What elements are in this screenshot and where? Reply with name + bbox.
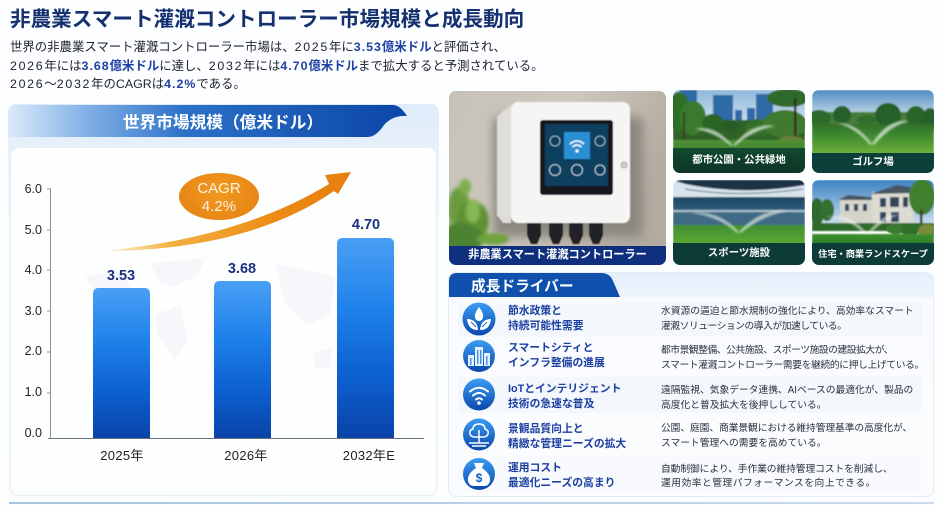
caption: urban park: 都市公園・公共緑地 <box>692 155 786 166</box>
y axis labels: 1.0 <box>25 385 42 399</box>
intro text block: 世界の非農業スマート灌漑コントローラー市場は、2025年に3.53億米ドルと評価され、 <box>10 40 506 54</box>
y axis labels <box>24 182 42 440</box>
y axis line and ticks <box>47 188 51 438</box>
driver title 3: IoTとインテリジェント <box>508 383 621 395</box>
intro text block: 2026年には3.68億米ドルに達し、2032年には4.70億米ドルまで拡大すると予測されている。 <box>10 58 544 72</box>
world map watermark <box>80 255 350 395</box>
icon: wifi <box>463 378 495 410</box>
callout: CAGR 4.2% <box>179 173 259 220</box>
value: 3.53: 3.53 <box>107 268 135 284</box>
driver title 2 <box>508 342 605 369</box>
row background 3 <box>458 377 922 413</box>
caption: residential: 住宅・商業ランドスケープ <box>818 249 928 259</box>
driver description 3 <box>661 384 913 411</box>
callout: CAGR 4.2%: 4.2% <box>202 198 236 215</box>
value: 4.70: 4.70 <box>352 217 380 233</box>
icon: money bag: $ <box>476 471 483 485</box>
driver title 4: 精緻な管理ニーズの拡大 <box>508 438 626 450</box>
photo: urban park <box>673 90 805 173</box>
caption: controller: 非農業スマート灌漑コントローラー <box>468 249 647 261</box>
driver title 2: スマートシティと <box>508 342 593 354</box>
driver title 1: 節水政策と <box>508 305 562 317</box>
panel: chart card <box>10 147 437 496</box>
intro text block: 2026～2032年のCAGRは4.2%である。 <box>10 77 246 91</box>
caption: golf <box>812 153 934 173</box>
caption: urban park <box>673 148 805 173</box>
arrow: growth trend <box>110 172 351 251</box>
driver description 2: 都市景観整備、公共施設、スポーツ施設の建設拡大が、 <box>661 345 893 356</box>
x axis line <box>48 438 424 439</box>
driver description 4: スマート管理への需要を高めている。 <box>661 438 826 449</box>
panel: market size chart <box>8 104 439 497</box>
driver description 4 <box>661 422 912 449</box>
caption: sports <box>673 243 805 265</box>
x label: 2025: 2025年 <box>100 448 144 463</box>
driver title 5: 運用コスト <box>508 462 562 474</box>
panel: growth drivers <box>448 272 934 497</box>
driver title 1 <box>508 304 584 332</box>
driver title 1: 持続可能性需要 <box>508 320 584 332</box>
driver description 2: スマート灌漑コントローラー需要を継続的に押し上げている。 <box>661 360 924 371</box>
photo: residential and commercial landscape <box>812 180 934 265</box>
x label: 2026: 2026年 <box>224 448 268 463</box>
driver description 4: 公園、庭園、商業景観における維持管理基準の高度化が、 <box>661 423 912 434</box>
icon: water drop and leaves <box>462 302 496 336</box>
y axis labels: 3.0 <box>25 304 42 318</box>
caption: golf: ゴルフ場 <box>852 157 894 168</box>
driver description 1: 灌漑ソリューションの導入が加速している。 <box>661 321 847 332</box>
driver title 4: 景観品質向上と <box>508 423 584 435</box>
caption: controller <box>449 246 666 265</box>
driver description 1: 水資源の逼迫と節水規制の強化により、高効率なスマート <box>661 306 914 317</box>
driver title 3: 技術の急速な普及 <box>508 398 594 410</box>
value: 3.68: 3.68 <box>228 261 256 277</box>
y axis labels: 2.0 <box>25 344 42 358</box>
driver description 3: 遠隔監視、気象データ連携、AIベースの最適化が、製品の <box>661 385 913 396</box>
photo: sports facility <box>673 180 805 265</box>
driver description 2 <box>661 344 924 371</box>
driver description 5: 運用効率と管理パフォーマンスを向上できる。 <box>661 478 876 489</box>
panel heading: global market size <box>8 105 407 137</box>
icon: tree <box>463 418 495 450</box>
driver title 3 <box>508 383 621 410</box>
driver title 2: インフラ整備の進展 <box>508 357 605 369</box>
y axis labels: 0.0 <box>25 426 42 440</box>
tab heading: growth drivers <box>449 273 620 297</box>
callout: CAGR 4.2%: CAGR <box>197 180 241 197</box>
icon: city buildings <box>463 340 495 372</box>
driver title 4 <box>508 422 626 450</box>
panel heading: global market size: 世界市場規模（億米ドル） <box>123 112 323 132</box>
tab heading: growth drivers: 成長ドライバー <box>471 277 574 295</box>
row background 5 <box>458 456 922 492</box>
row background 1 <box>458 302 922 337</box>
bar: 2026 <box>214 280 271 438</box>
driver title 5: 最適化ニーズの高まり <box>508 477 615 489</box>
driver description 5: 自動制御により、手作業の維持管理コストを削減し、 <box>661 464 892 475</box>
driver description 3: 高度化と普及拡大を後押ししている。 <box>661 400 826 411</box>
icon: money bag <box>463 458 495 490</box>
bar: 2025 <box>92 288 150 438</box>
intro text block <box>10 40 544 91</box>
y axis labels: 5.0 <box>25 223 42 237</box>
title: 非農業スマート灌漑コントローラー市場規模と成長動向 <box>10 8 524 31</box>
y axis labels: 4.0 <box>25 263 42 277</box>
caption: sports: スポーツ施設 <box>708 248 770 259</box>
driver title 5 <box>508 462 615 489</box>
driver description 5 <box>661 464 892 489</box>
photo: smart irrigation controller <box>449 91 666 265</box>
bar: 2032E <box>337 238 394 438</box>
caption: residential <box>812 243 934 265</box>
bottom rule <box>9 502 934 504</box>
x label: 2032E: 2032年E <box>343 448 395 463</box>
driver description 1 <box>661 306 914 332</box>
photo: golf course <box>812 90 934 173</box>
y axis labels: 6.0 <box>25 182 42 196</box>
bar chart <box>24 182 424 463</box>
